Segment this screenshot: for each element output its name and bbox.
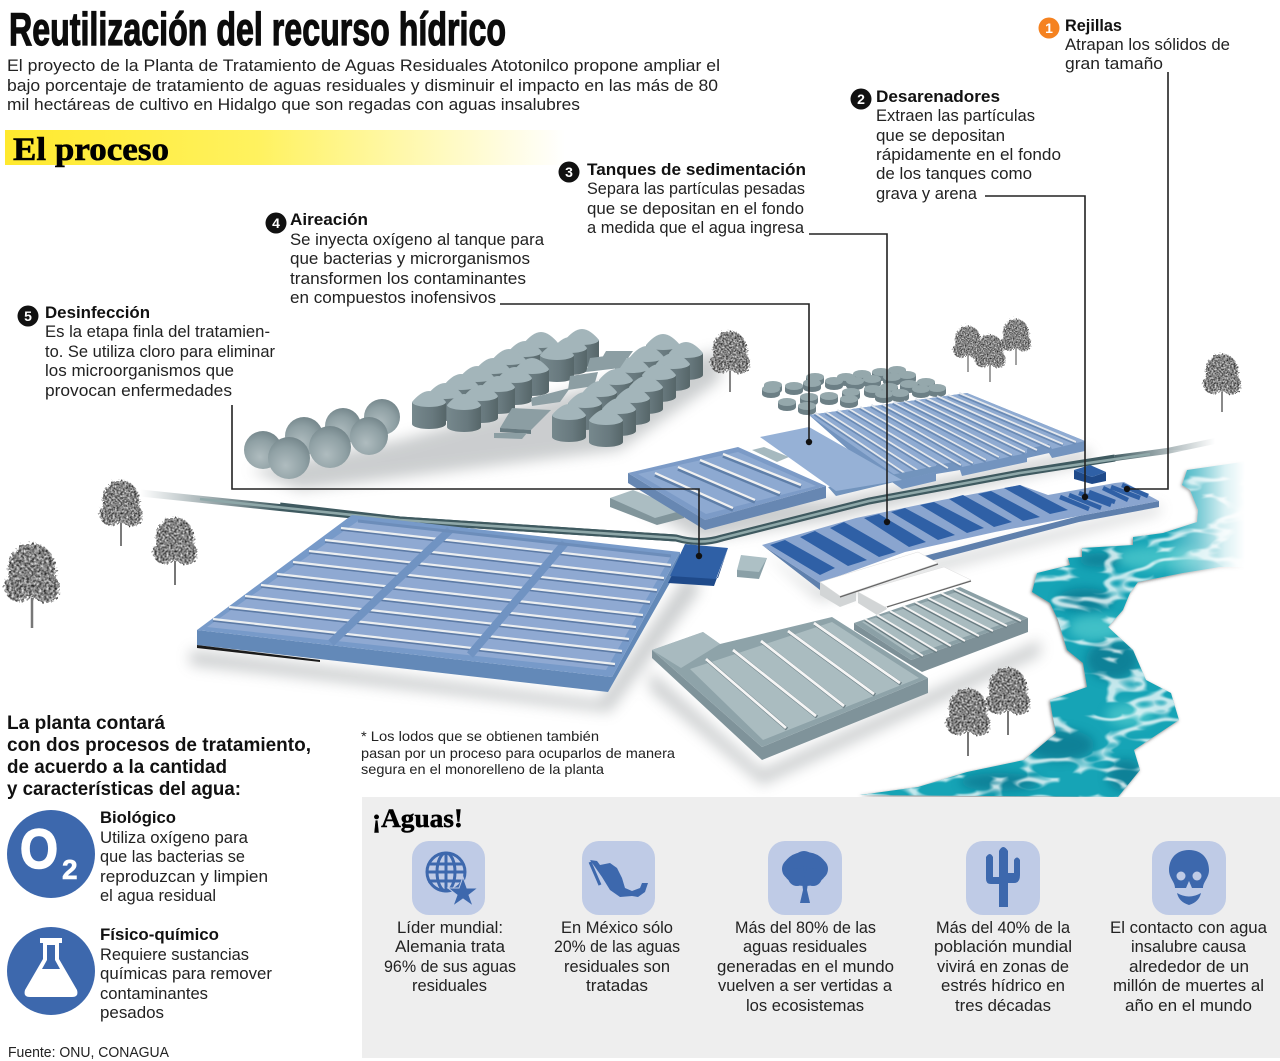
callout 1: rejillas: 1	[1045, 20, 1053, 36]
fact: estrés hídrico: tres décadas	[955, 997, 1051, 1015]
callout 5: desinfección: Desinfección	[45, 303, 150, 322]
icon: tree	[768, 841, 842, 915]
disinfection tank	[668, 544, 728, 586]
footnote: lodos: pasan por un proceso para ocuparlos de manera	[361, 745, 675, 761]
text: físico-químico: químicas para remover	[100, 965, 273, 983]
callout 1: rejillas	[1038, 16, 1230, 73]
icon: flask	[7, 927, 95, 1015]
icon: globe and star	[412, 841, 485, 915]
fact: ecosistemas	[717, 919, 894, 1015]
callout 2: desarenadores	[850, 87, 1061, 203]
fact: Alemania: Líder mundial:	[397, 919, 503, 937]
heading: dos procesos	[7, 713, 311, 800]
striped tank	[809, 393, 1085, 489]
callout 3: tanques de sedimentación: que se depositan en el fondo	[587, 200, 804, 218]
gray slab under tank	[610, 490, 684, 525]
callout 1: rejillas: Atrapan los sólidos de	[1065, 36, 1230, 54]
intro text: El proyecto de la Planta de Tratamiento de Aguas Residuales Atotonilco propone ampliar el	[7, 57, 720, 75]
fact: ecosistemas: aguas residuales	[743, 938, 867, 956]
icon: O2	[7, 810, 95, 898]
spheres	[244, 399, 400, 479]
fact: estrés hídrico: Más del 40% de la	[936, 919, 1071, 937]
primary settling trays	[762, 482, 1159, 590]
callout 2: desarenadores: Desarenadores	[876, 87, 1000, 106]
leader: rejillas	[1124, 72, 1168, 492]
callout 2: desarenadores: 2	[857, 91, 865, 107]
callout 3: tanques de sedimentación	[558, 160, 806, 237]
section heading: el proceso: El proceso	[13, 132, 169, 168]
fact: estrés hídrico	[934, 919, 1072, 1015]
callout 4: aireación: transformen los contaminantes	[290, 270, 526, 288]
fact: muertes: insalubre causa	[1131, 938, 1247, 956]
icon: O2: O	[20, 817, 58, 880]
callout 3: tanques de sedimentación: Separa las partículas pesadas	[587, 180, 805, 198]
fact: muertes: año en el mundo	[1125, 997, 1252, 1015]
road	[140, 441, 1215, 542]
small blue box	[1074, 465, 1106, 484]
text: biológico: que las bacterias se	[100, 848, 245, 866]
fact: muertes: El contacto con agua	[1110, 919, 1268, 937]
fact: estrés hídrico: vivirá en zonas de	[937, 958, 1069, 976]
fact: muertes	[1110, 919, 1268, 1015]
text: biológico: Biológico	[100, 808, 176, 827]
gray tank right	[854, 587, 1028, 672]
small gray slab	[752, 447, 789, 462]
fact: Alemania: Alemania trata	[395, 938, 506, 956]
text: físico-químico: contaminantes	[100, 985, 208, 1003]
callout 5: desinfección: provocan enfermedades	[45, 382, 232, 400]
icon: skull	[1152, 841, 1226, 915]
fact: estrés hídrico: población mundial	[934, 938, 1072, 956]
callout 2: desarenadores: Extraen las partículas	[876, 107, 1035, 125]
heading: dos procesos: con dos procesos de tratamiento,	[7, 735, 311, 756]
silos	[412, 329, 703, 447]
callout 2: desarenadores: de los tanques como	[876, 165, 1032, 183]
callout 4: aireación: 4	[272, 215, 280, 231]
settling disks	[762, 366, 946, 415]
intro text: bajo porcentaje de tratamiento de aguas residuales y disminuir el impacto en las más de 80	[7, 77, 718, 95]
fact: ecosistemas: los ecosistemas	[746, 997, 864, 1015]
leader: desarenadores	[985, 196, 1088, 500]
intro text: mil hectáreas de cultivo en Hidalgo que son regadas con aguas insalubres	[7, 96, 580, 114]
ground shadows	[190, 350, 1160, 785]
gray tank large	[652, 617, 928, 760]
callout 2: desarenadores: grava y arena	[876, 185, 978, 203]
callout 4: aireación	[266, 210, 545, 307]
fact: México: En México sólo	[561, 919, 673, 937]
small gray box	[737, 555, 767, 579]
fact: México	[554, 919, 680, 995]
icon: map of Mexico	[582, 841, 655, 915]
fact: muertes: alrededor de un	[1129, 958, 1249, 976]
callout 5: desinfección	[18, 303, 276, 400]
leader lines	[232, 72, 1168, 559]
callout 2: desarenadores: rápidamente en el fondo	[876, 146, 1061, 164]
heading: dos procesos: La planta contará	[7, 713, 165, 734]
callout 1: rejillas: Rejillas	[1065, 16, 1122, 35]
callout 5: desinfección: los microorganismos que	[45, 362, 234, 380]
leader: aireación	[500, 304, 812, 445]
river shading and caustics	[862, 476, 1238, 797]
callout 4: aireación: Se inyecta oxígeno al tanque para	[290, 231, 545, 249]
text: biológico: reproduzcan y limpien	[100, 868, 268, 886]
text: físico-químico: Requiere sustancias	[100, 946, 249, 964]
section heading: el proceso	[5, 130, 565, 168]
footnote: lodos: * Los lodos que se obtienen también	[361, 728, 599, 744]
plant illustration	[4, 319, 1280, 800]
river	[860, 450, 1240, 797]
icon: O2: 2	[62, 854, 78, 885]
fact: Alemania	[384, 919, 516, 995]
fact: México: residuales son	[564, 958, 670, 976]
callout 1: rejillas: gran tamaño	[1065, 55, 1163, 73]
footnote: lodos	[361, 728, 675, 777]
fact: ecosistemas: Más del 80% de las	[735, 919, 876, 937]
text: físico-químico: pesados	[100, 1004, 164, 1022]
fact: México: 20% de las aguas	[554, 938, 680, 956]
heading: dos procesos: de acuerdo a la cantidad	[7, 757, 227, 778]
text: biológico: el agua residual	[100, 887, 216, 905]
source: Fuente: ONU, CONAGUA	[8, 1045, 169, 1061]
fact: estrés hídrico: estrés hídrico en	[941, 977, 1065, 995]
leader: tanques	[809, 234, 890, 525]
callout 5: desinfección: 5	[24, 308, 32, 324]
callout 3: tanques de sedimentación: 3	[565, 164, 573, 180]
fact: Alemania: 96% de sus aguas	[384, 958, 516, 976]
intro text	[7, 57, 720, 114]
callout 4: aireación: que bacterias y microrganismos	[290, 250, 530, 268]
plain panel: sedimentation inlet	[760, 427, 936, 496]
heading: dos procesos: y características del agua:	[7, 779, 241, 800]
white slabs	[820, 552, 971, 615]
icon: cactus	[966, 841, 1040, 915]
large biological tank	[197, 515, 680, 692]
fact: muertes: millón de muertes al	[1113, 977, 1264, 995]
trees	[4, 319, 1241, 756]
callout 5: desinfección: Es la etapa finla del tratamien-	[45, 323, 270, 341]
callout 4: aireación: en compuestos inofensivos	[290, 289, 496, 307]
panel: aguas	[362, 797, 1280, 1058]
text: físico-químico: Físico-químico	[100, 925, 219, 944]
text: físico-químico	[100, 925, 273, 1022]
fact: ecosistemas: vuelven a ser vertidas a	[718, 977, 893, 995]
fact: ecosistemas: generadas en el mundo	[717, 958, 894, 976]
callout 4: aireación: Aireación	[290, 210, 368, 229]
callout 5: desinfección: to. Se utiliza cloro para eliminar	[45, 343, 276, 361]
text: biológico: Utiliza oxígeno para	[100, 829, 249, 847]
fact: Alemania: residuales	[412, 977, 487, 995]
footnote: lodos: segura en el monorelleno de la planta	[361, 761, 604, 777]
text: biológico	[100, 808, 268, 905]
river fade to white	[1165, 450, 1280, 582]
callout 3: tanques de sedimentación: Tanques de sedimentación	[587, 160, 806, 179]
medium aeration tank	[628, 447, 826, 530]
title: Reutilización del recurso hídrico	[9, 3, 506, 55]
callout 3: tanques de sedimentación: a medida que el agua ingresa	[587, 219, 805, 237]
fact: México: tratadas	[586, 977, 648, 995]
panel heading: ¡Aguas!	[372, 804, 463, 833]
leader: desinfección	[232, 405, 702, 559]
callout 2: desarenadores: que se depositan	[876, 127, 1005, 145]
